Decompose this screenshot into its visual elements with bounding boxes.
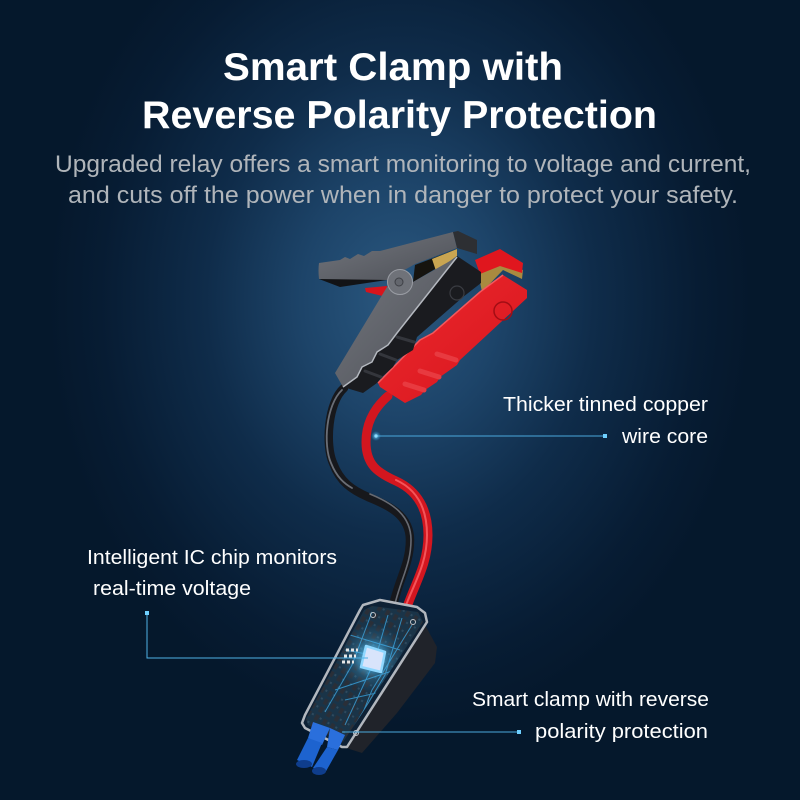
callout: IC chip <box>87 547 368 658</box>
icon: red clamp <box>378 249 527 403</box>
black wire <box>327 388 411 610</box>
callout: reverse polarity <box>342 689 709 743</box>
icon: smart clamp module <box>300 598 437 753</box>
icon: EC5 connector <box>296 722 345 775</box>
title: Smart Clamp with <box>223 46 563 89</box>
callout: IC chip: real-time voltage <box>93 578 251 600</box>
title <box>142 46 657 137</box>
subtitle: and cuts off the power when in danger to protect your safety. <box>68 182 738 209</box>
callout: IC chip: Intelligent IC chip monitors <box>87 547 337 569</box>
callout: wire core <box>371 394 708 448</box>
callout: reverse polarity: polarity protection <box>535 721 708 743</box>
red wire <box>366 396 428 610</box>
subtitle: Upgraded relay offers a smart monitoring to voltage and current, <box>55 151 751 178</box>
callout: reverse polarity: Smart clamp with reverse <box>472 689 709 711</box>
icon: black clamp <box>318 231 481 393</box>
callout: wire core: wire core <box>621 426 708 448</box>
subtitle <box>55 151 751 209</box>
callout: wire core: Thicker tinned copper <box>503 394 708 416</box>
title: Reverse Polarity Protection <box>142 94 657 137</box>
